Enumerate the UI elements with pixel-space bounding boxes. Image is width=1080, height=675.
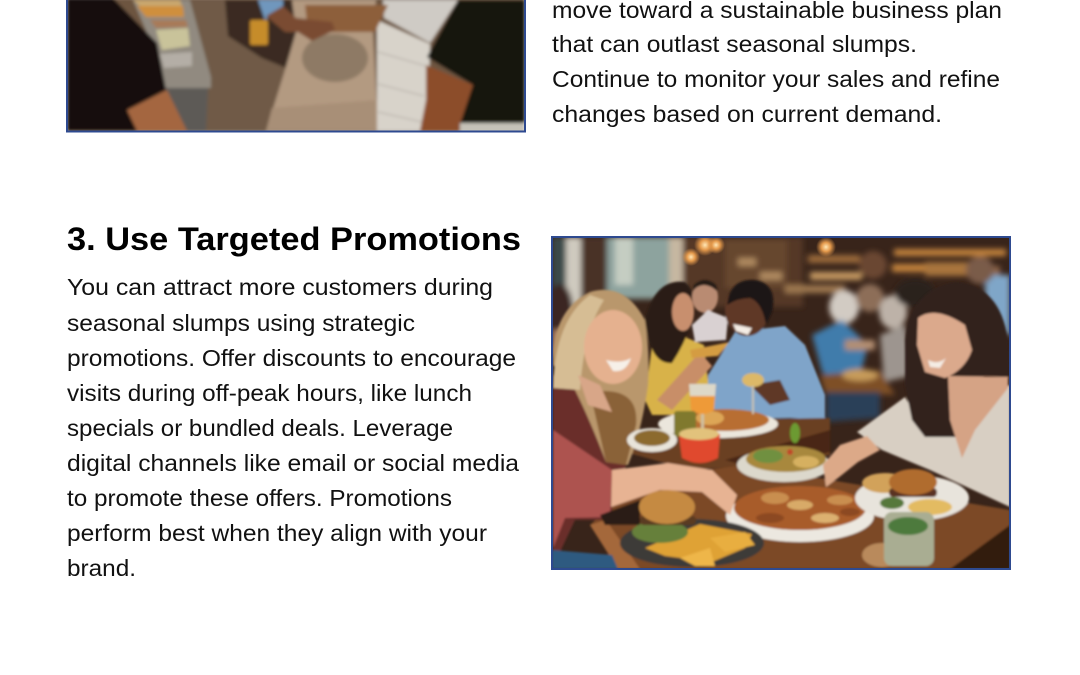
wooden tables — [590, 418, 1010, 569]
red cocktail — [679, 428, 720, 463]
burger plate left — [600, 490, 764, 567]
blurred restaurant background — [547, 237, 1010, 422]
diner: woman in yellow — [645, 282, 730, 415]
small plate — [627, 428, 677, 452]
salad plate — [737, 423, 831, 482]
paragraph: strategic promotions: to promote these offers. Promotions — [67, 485, 452, 511]
staff member right — [420, 65, 473, 131]
background diner: grey hair — [879, 295, 907, 329]
heading: 3. Use Targeted Promotions: 3. Use Targeted Promotions — [67, 221, 521, 257]
paragraph: sustainable business plan: changes based on current demand. — [552, 101, 942, 127]
paragraph: strategic promotions: specials or bundled deals. Leverage — [67, 415, 453, 441]
background legs — [826, 392, 880, 422]
background diner: old man — [829, 290, 859, 324]
paragraph: sustainable business plan: that can outlast seasonal slumps. — [552, 31, 917, 57]
photo: server with clipboard and staff in kitchen — [67, 0, 525, 133]
pendant lamps — [682, 238, 836, 266]
paragraph: strategic promotions — [67, 274, 519, 581]
photo: friends enjoying a meal in a restaurant — [547, 234, 1010, 569]
plate of roasted bites — [726, 486, 874, 542]
paragraph: strategic promotions: brand. — [67, 555, 136, 581]
steel counter with food trays — [133, 0, 211, 131]
paragraph: sustainable business plan: Continue to monitor your sales and refine — [552, 66, 1000, 92]
paragraph: strategic promotions: visits during off-peak hours, like lunch — [67, 380, 472, 406]
white tile wall — [377, 20, 430, 131]
yellow container — [250, 20, 268, 45]
glass with mint drink on coaster — [862, 512, 934, 567]
blonde woman — [552, 290, 737, 569]
diner: man in blue shirt — [708, 280, 825, 420]
burger plate right — [855, 469, 969, 521]
dark-haired woman — [823, 282, 1010, 507]
sleeve and hand — [258, 0, 283, 20]
paragraph: strategic promotions: perform best when they align with your — [67, 520, 487, 546]
paragraph: strategic promotions: You can attract more customers during — [67, 274, 493, 300]
paragraph: sustainable business plan — [552, 0, 1002, 127]
diner: man with glasses — [692, 280, 728, 342]
apron — [272, 0, 378, 110]
clipboard — [305, 5, 388, 32]
paragraph: strategic promotions: seasonal slumps using strategic — [67, 310, 415, 336]
paragraph: strategic promotions: promotions. Offer discounts to encourage — [67, 345, 516, 371]
orange cocktail — [689, 384, 716, 436]
staff member left — [127, 90, 187, 131]
paragraph: strategic promotions: digital channels like email or social media — [67, 450, 519, 476]
glass held by man — [742, 373, 764, 414]
green drink — [674, 411, 696, 437]
background table — [820, 370, 895, 395]
plate with pizza food — [658, 409, 778, 438]
floor — [190, 0, 300, 132]
